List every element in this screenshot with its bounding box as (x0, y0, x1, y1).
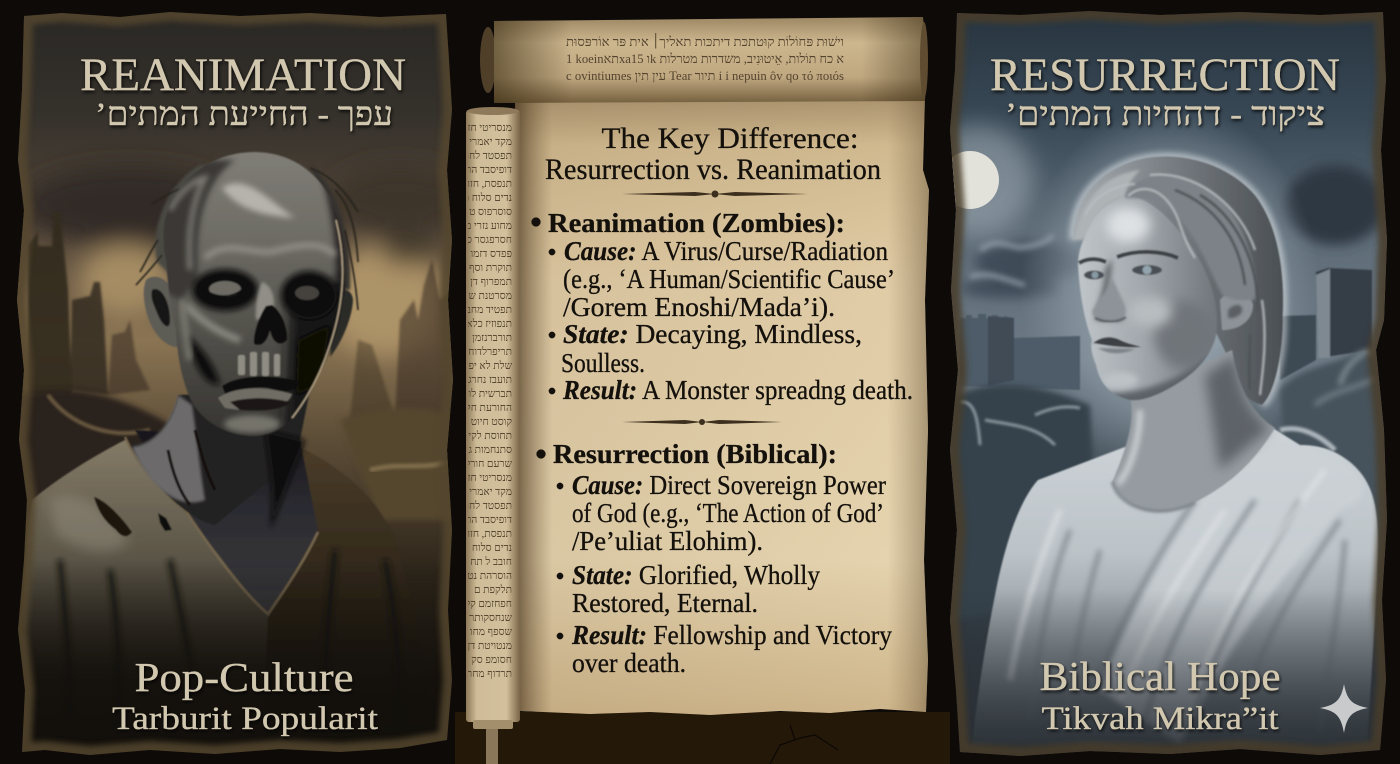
storm clouds (20, 165, 470, 355)
hair strands (1085, 175, 1265, 395)
heading: reanimation: REANIMATION (80, 49, 406, 101)
man figure (972, 156, 1378, 745)
shirt: left side (27, 440, 268, 646)
cheekbones (186, 305, 240, 340)
ears (144, 277, 178, 347)
hair sides (160, 160, 235, 300)
section: resurrection: over death. (572, 648, 686, 678)
cheek hollows (187, 335, 220, 385)
scroll: side roll: תריפרלדוח (468, 346, 512, 358)
section: reanimation: Result: A Monster spreadng death. (562, 375, 913, 405)
caption: biblical hope: Biblical Hope (1040, 653, 1280, 699)
scroll: side roll: נדים סלוח ת (463, 192, 512, 204)
scroll: side roll: מקד יאמרי (469, 487, 512, 498)
torn border (950, 11, 1387, 756)
nose bridge (256, 282, 274, 320)
section: resurrection: /Pe’uliat Elohim). (572, 526, 763, 556)
moon (952, 151, 999, 209)
scroll: side roll: חובב ל תח (470, 556, 512, 568)
neck (1112, 350, 1275, 511)
section: resurrection: Restored, Eternal. (572, 588, 758, 618)
section: resurrection (536, 439, 892, 678)
section: reanimation (532, 208, 913, 405)
scroll: side roll: תפטיד מחב (466, 305, 512, 316)
scroll: side roll: מקד יאמרי ל (461, 136, 512, 148)
brows (1079, 252, 1178, 263)
scroll: side roll (455, 107, 520, 729)
panel: reanimation (15, 10, 470, 760)
scroll: side roll: מסרטנת ש (468, 291, 512, 302)
scroll: side roll: תחוסת לקיט (462, 430, 512, 442)
scroll: side roll: תורברנזמן (472, 333, 512, 344)
eye sockets (192, 269, 258, 311)
shirt holes (94, 497, 132, 536)
scroll: side roll: מנסריטי חזן ש (455, 123, 512, 134)
caption: pop-culture: Pop-Culture (134, 654, 354, 700)
scroll: side roll: תפסטד לחוד (461, 150, 512, 162)
heading: resurrection: RESURRECTION (990, 49, 1340, 101)
scroll: side roll: חסרפגסר ס (466, 235, 512, 246)
wasteland (20, 390, 452, 520)
scroll: side roll: שספף מחו (470, 627, 513, 638)
bottom fade (945, 590, 1390, 760)
left cheek light (182, 300, 190, 360)
scroll: side roll: תנפסת, חזו (467, 179, 512, 190)
clouds (960, 165, 1385, 298)
section: reanimation: Reanimation (Zombies): (548, 208, 845, 238)
zombie figure (27, 151, 397, 646)
scroll: side roll: החורעת חלו (463, 402, 512, 414)
scroll: side roll: חפחזמם קל (464, 598, 512, 610)
scroll: side roll: תפסטד לחוד (461, 500, 512, 512)
caption: pop-culture: Tarburit Popularit (112, 701, 378, 737)
shirt folds (54, 548, 397, 648)
scroll text (566, 32, 844, 83)
caption: pop-culture (112, 654, 378, 737)
background: cracked floor (455, 712, 950, 764)
scroll: side roll: תועבז נחרג (468, 375, 512, 386)
section: resurrection: State: Glorified, Wholly (572, 560, 820, 590)
nasal cavity (254, 305, 287, 345)
heading: resurrection: ציקוד - דהחיות המתים’ (1005, 97, 1325, 133)
collar highlight (125, 437, 318, 614)
scroll: side roll: דופיסבד הרי (463, 515, 512, 526)
hair back (1073, 156, 1283, 405)
scroll: side roll: תברשית לוס (463, 388, 512, 400)
shirt: right side (285, 449, 386, 592)
rim light (292, 220, 343, 418)
neck (130, 390, 310, 525)
scroll text: c ovintiumes עין תין Tear תיור i i nepuin ôv qo τό ποιόs (566, 68, 844, 83)
castle: left (960, 314, 1080, 390)
chest (135, 430, 318, 618)
scroll: side roll: מנסריטי חזן (465, 473, 512, 484)
panel: parchment (455, 17, 929, 729)
panel: resurrection (923, 8, 1390, 760)
rocks: left (950, 385, 1100, 620)
section: resurrection: Result: Fellowship and Victory (571, 620, 892, 650)
hair front (1075, 170, 1140, 240)
mouth (222, 376, 300, 396)
section: reanimation: Soulless. (561, 348, 645, 378)
heading: resurrection (990, 49, 1340, 133)
hair wisps (136, 168, 358, 310)
scroll: side roll: תרדוף מחרי (464, 669, 512, 680)
nose (1092, 278, 1126, 321)
face details (1095, 207, 1215, 410)
forehead highlight (222, 183, 295, 218)
scroll: side roll: קוסט חיוט (471, 417, 512, 428)
scroll: side roll: מחוע נזרי ם (465, 221, 512, 232)
scroll: side roll: תנפוזיז כלא (466, 318, 512, 330)
scroll text: 1 koeinתאxaו 15k א כח תוֹלות, אֵיטוּנִיב, משדרות מטרלות (566, 51, 844, 66)
hair mass (154, 164, 204, 274)
head (163, 152, 346, 436)
title: Resurrection vs. Reanimation (545, 153, 881, 186)
face shading (160, 160, 350, 440)
divider (622, 190, 808, 198)
section: reanimation: State: Decaying, Mindless, (563, 319, 862, 349)
scroll: side roll: סתנחמות גו (466, 445, 512, 456)
scroll: side roll: חסומפ סק (471, 655, 512, 666)
scroll: side roll: דופיסבד הרי (463, 165, 512, 176)
chin (224, 415, 280, 433)
moon glow (923, 125, 1033, 235)
lower lip (218, 388, 292, 410)
mouth (1093, 337, 1141, 353)
robe (972, 425, 1378, 745)
scroll: side roll: תנפסת, חזו (467, 529, 512, 540)
scroll: side roll: תמפרוף דן (470, 277, 512, 288)
caption: biblical hope: Tikvah Mikra”it (1042, 701, 1278, 737)
torn border (17, 12, 453, 755)
neckline (1112, 482, 1195, 511)
wooden stick (486, 722, 498, 764)
icon: sparkle (1320, 684, 1368, 733)
scroll: side roll: הוסרהת נט (467, 571, 512, 582)
scroll: side roll: תוקרת וסף (469, 263, 512, 274)
title (545, 122, 881, 186)
divider (622, 419, 782, 425)
section: reanimation: /Gorem Enoshi/Mada’i). (563, 292, 835, 322)
scroll: side roll: שרעם חורל (464, 458, 513, 470)
scroll: side roll: שלת לא יפ (469, 360, 513, 372)
scroll: side roll: נדים סלוח (472, 542, 512, 554)
scroll: side roll: פפדס דזמו (470, 249, 512, 260)
bottom fade (26, 572, 444, 739)
section: reanimation: (e.g., ‘A Human/Scientific Cause’ (563, 264, 895, 294)
castle: right (1280, 268, 1372, 380)
title: The Key Difference: (602, 122, 858, 155)
rocks: right (1280, 350, 1385, 560)
scroll text: וישׁוּת פּחוֹלוֹת קוּטתכּת דיתכּות תאליך׀ אית פּר אוֹרפּסוּת (566, 32, 844, 49)
heading: reanimation: עפך - החייעת המתים’ (95, 97, 393, 133)
section: resurrection: Cause: Direct Sovereign Power (572, 470, 886, 500)
eyes (1084, 265, 1162, 280)
head halo (1030, 116, 1303, 448)
scroll: side roll: שנחסקותר (469, 613, 513, 624)
scroll: top roll (480, 17, 928, 103)
face (1078, 196, 1217, 400)
teeth (238, 352, 280, 376)
section: resurrection: of God (e.g., ‘The Action of God’ (572, 498, 884, 528)
caption: biblical hope (1040, 653, 1280, 737)
ear (1220, 292, 1253, 330)
rim glow (1073, 156, 1283, 405)
scroll: side roll: סוסרפוס ט (469, 207, 512, 218)
section: reanimation: Cause: A Virus/Curse/Radiation (564, 236, 888, 266)
robe folds (1030, 500, 1345, 730)
heading: reanimation (80, 49, 406, 133)
section: resurrection: Resurrection (Biblical): (553, 439, 837, 469)
sash (1100, 451, 1363, 745)
scroll: side roll: תלקפת ם (474, 584, 512, 596)
ruined city (28, 212, 452, 430)
right face shadow (285, 280, 350, 440)
scroll: side roll: מנטויטת דן (467, 641, 512, 652)
